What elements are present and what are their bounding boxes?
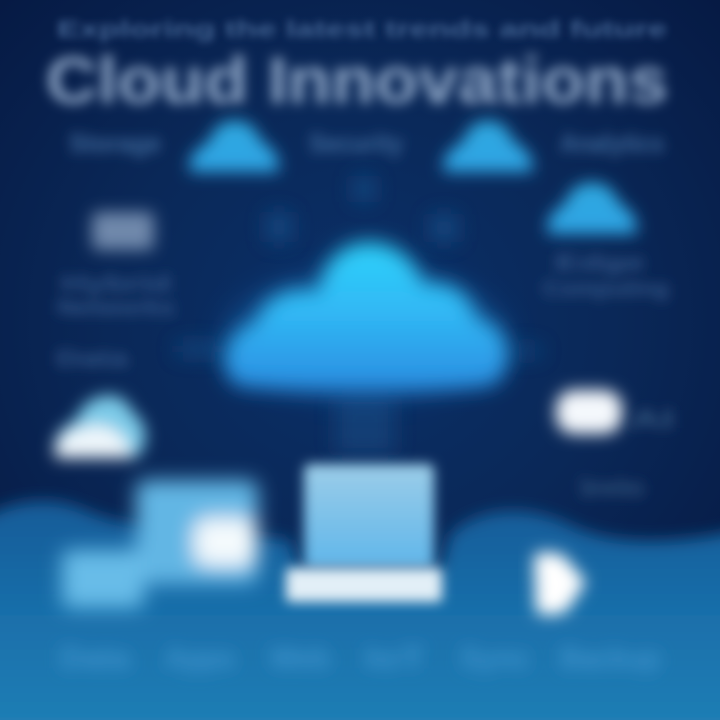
icon: small cloud top left: [189, 120, 279, 172]
icon: left badge: [92, 212, 154, 250]
right column text: [543, 250, 669, 301]
left column: badge and text: [56, 212, 175, 371]
icon: white cloud left: [55, 395, 146, 458]
right column text: Edge: [555, 250, 645, 275]
bottom row labels: Data: [60, 642, 130, 675]
text block: right lower: AI: [630, 404, 674, 434]
icon: white document: [534, 552, 586, 615]
bottom row labels: IoT: [365, 642, 425, 675]
bottom row labels: Apps: [165, 642, 235, 675]
heading: Cloud Innovations: [46, 43, 668, 117]
laptop base: [286, 568, 442, 602]
top row labels: Storage: [69, 128, 161, 158]
phone block: [62, 550, 144, 608]
central cloud: [224, 242, 508, 390]
laptop screen: [304, 464, 434, 568]
text block: right lower: [580, 404, 674, 502]
bottom row labels: Sync: [460, 642, 530, 675]
background hills: [0, 501, 720, 720]
icon: small cloud right: [547, 182, 637, 234]
top row labels: Analytics: [560, 128, 664, 158]
text block: left: Data: [56, 346, 129, 371]
text block: left: Hybrid: [61, 271, 171, 296]
icon: small cloud top right: [443, 120, 533, 172]
right column text: Computing: [543, 276, 669, 301]
central cloud glow: [225, 275, 505, 395]
laptop: [286, 464, 442, 602]
tablet: [136, 480, 258, 584]
connector marks: [176, 176, 542, 455]
top row labels: [69, 128, 664, 158]
subtitle line: Exploring the latest trends and future: [57, 16, 667, 42]
bottom row labels: Web: [270, 642, 330, 675]
text block: left: Networks: [57, 295, 175, 320]
device group left: [62, 480, 258, 608]
text block: right lower: Serverless: [580, 472, 644, 502]
text block: left: [56, 271, 175, 371]
icon: white pill right: [556, 390, 622, 434]
bottom row labels: [60, 642, 660, 675]
bottom row labels: Backup: [560, 642, 660, 675]
title: [46, 16, 668, 117]
top row labels: Security: [309, 128, 403, 158]
white highlight: [194, 518, 256, 566]
